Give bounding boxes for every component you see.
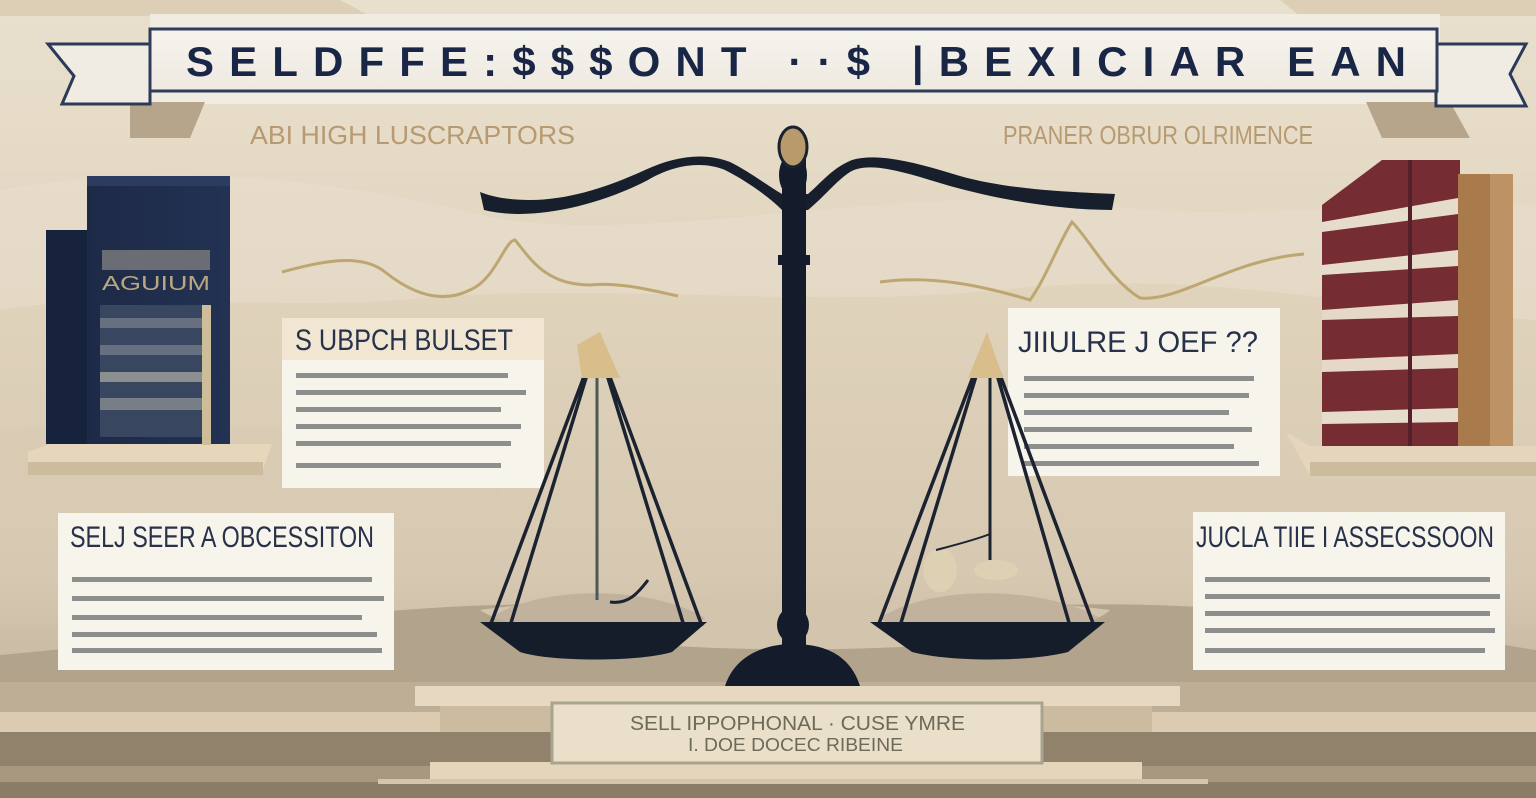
heading: S UBPCH BULSET xyxy=(295,324,513,357)
left subtitle: ABI HIGH LUSCRAPTORS xyxy=(250,120,575,150)
right pan xyxy=(870,332,1105,660)
heading: JIIULRE J OEF ?? xyxy=(1018,326,1258,359)
caption plaque: I. DOE DOCEC RIBEINE xyxy=(688,735,903,755)
caption plaque: SELL IPPOPHONAL · CUSE YMRE xyxy=(630,713,965,735)
icon: navy books on shelf xyxy=(28,176,272,475)
decorative gold lines left xyxy=(282,240,678,297)
pedestal xyxy=(378,686,1208,784)
icon: navy books on shelf: AGUIUM xyxy=(102,273,210,295)
left pan xyxy=(480,332,707,660)
title: SELDFFE:$$$ONT ··$ |BEXICIAR EAN xyxy=(186,38,1406,86)
column xyxy=(782,150,806,670)
right subtitle: PRANER OBRUR OLRIMENCE xyxy=(1003,120,1313,150)
panel: right upper text xyxy=(1008,308,1280,476)
base xyxy=(725,644,860,686)
panel: left upper text xyxy=(282,318,544,488)
beam xyxy=(480,156,1115,214)
panel: left lower text xyxy=(58,513,394,670)
title banner xyxy=(48,29,1526,106)
decorative gold lines right xyxy=(880,222,1304,300)
caption plaque xyxy=(552,703,1042,763)
heading: SELJ SEER A OBCESSITON xyxy=(70,521,374,554)
icon: red books on shelf xyxy=(1286,160,1536,476)
balance scale xyxy=(480,127,1115,686)
panel: right lower text xyxy=(1193,512,1505,670)
